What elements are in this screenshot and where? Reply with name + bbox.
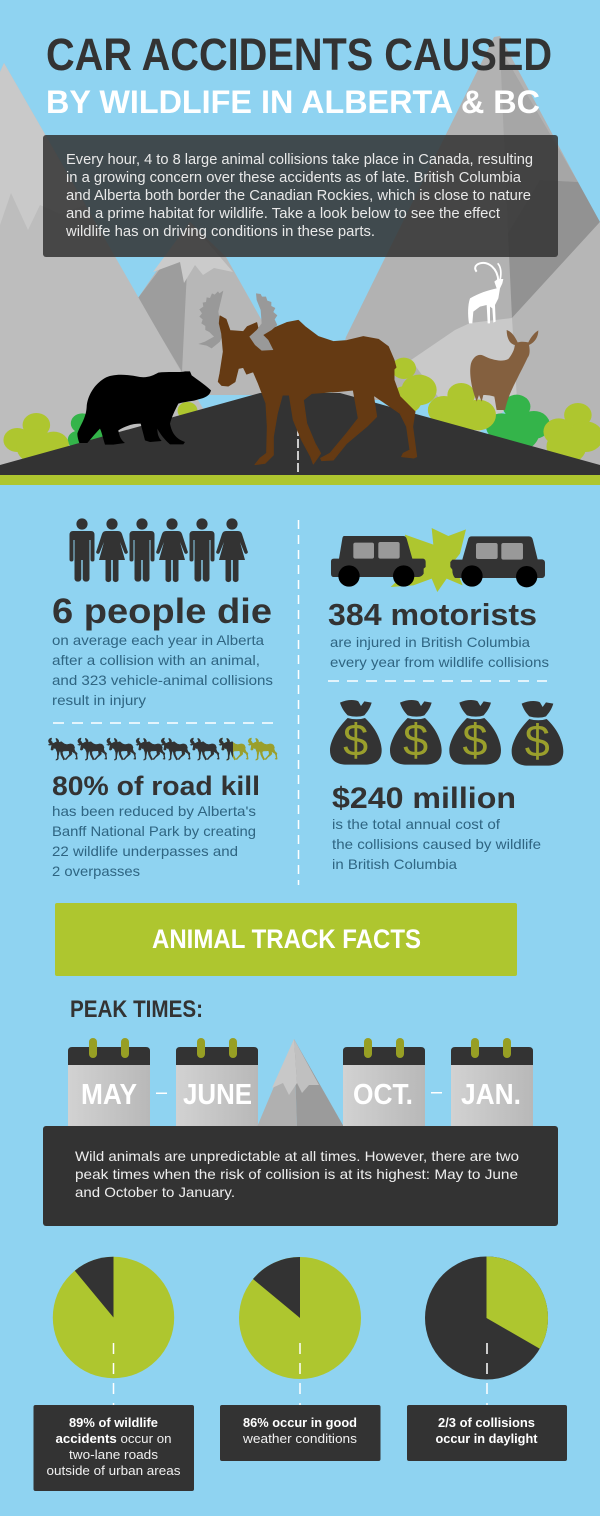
right mountain xyxy=(330,36,600,470)
heading: 80% of road kill xyxy=(52,771,260,801)
pie chart: 2/3 in daylight xyxy=(425,1256,548,1405)
icon: money bags: $ xyxy=(403,714,428,765)
callout: 86% xyxy=(220,1405,380,1461)
description: are injured in British Columbia xyxy=(330,634,530,650)
calendar: June xyxy=(176,1038,258,1127)
heading: 384 motorists xyxy=(328,597,537,632)
dash between May and June xyxy=(156,1092,167,1094)
description: and 323 vehicle-animal collisions xyxy=(52,672,273,688)
description: every year from wildlife collisions xyxy=(330,654,549,670)
icon: deer xyxy=(470,330,538,410)
description xyxy=(332,816,541,872)
icon: mountain goat xyxy=(468,263,503,323)
description xyxy=(330,634,549,670)
callout: 89%: outside of urban areas xyxy=(46,1463,181,1478)
panel: intro text: in a growing concern over these accidents as of late. British Columbia xyxy=(66,170,522,186)
icon: bear xyxy=(77,371,211,445)
calendar: January: JAN. xyxy=(461,1079,521,1111)
description xyxy=(52,803,256,879)
description: on average each year in Alberta xyxy=(52,632,264,648)
stat: 80% of road kill xyxy=(48,738,277,879)
description: Banff National Park by creating xyxy=(52,823,256,839)
stat: 384 motorists xyxy=(328,528,549,670)
icon: row of people xyxy=(70,518,248,582)
callout: 2/3: 2/3 of collisions xyxy=(438,1415,535,1430)
panel: peak times explanation: Wild animals are unpredictable at all times. However, there are two xyxy=(75,1148,519,1164)
pie chart: 86% good weather xyxy=(239,1257,361,1405)
icon: money bags: $ xyxy=(525,715,550,766)
description: has been reduced by Alberta's xyxy=(52,803,256,819)
callout: 89%: accidents occur on xyxy=(56,1431,172,1446)
description: in British Columbia xyxy=(332,856,457,872)
calendar: May xyxy=(68,1038,150,1127)
description: result in injury xyxy=(52,692,146,708)
callout: 86%: 86% occur in good xyxy=(243,1415,357,1430)
hero scene: mountains, road and animals xyxy=(0,36,600,485)
callout: 89%: 89% of wildlife xyxy=(69,1415,158,1430)
panel: peak times explanation xyxy=(43,1126,558,1226)
panel: peak times explanation: and October to January. xyxy=(75,1184,235,1200)
middle mountain xyxy=(138,222,300,395)
panel: intro text: Every hour, 4 to 8 large animal collisions take place in Canada, resulting xyxy=(66,152,533,168)
icon: money bags: $ xyxy=(343,714,368,765)
title line 2: BY WILDLIFE IN ALBERTA & BC xyxy=(46,84,540,120)
heading: $240 million xyxy=(332,782,516,815)
title xyxy=(46,29,552,120)
panel: intro text: and Alberta both border the Canadian Rockies, which is close to nature xyxy=(66,188,531,204)
road xyxy=(0,393,600,475)
icon: mountain xyxy=(257,1039,344,1127)
callout: 2/3 xyxy=(407,1405,567,1461)
icon: row of moose, 80% dark xyxy=(48,738,277,760)
banner: animal track facts xyxy=(55,903,517,976)
description: 22 wildlife underpasses and xyxy=(52,843,238,859)
bushes xyxy=(3,358,600,464)
panel: intro text: wildlife has on driving conditions in these parts. xyxy=(65,224,375,240)
left mountain xyxy=(0,63,240,470)
icon: money bags: $ xyxy=(462,714,488,765)
heading: 6 people die xyxy=(52,592,272,631)
callout: 89% xyxy=(34,1405,194,1491)
panel: intro text xyxy=(43,135,558,257)
stat: $240 million xyxy=(330,700,563,872)
heading: peak times: PEAK TIMES: xyxy=(70,996,203,1023)
calendar: May: MAY xyxy=(81,1079,137,1111)
panel: peak times explanation: peak times when the risk of collision is at its highest: May to June xyxy=(75,1166,518,1182)
callout: 2/3: occur in daylight xyxy=(436,1431,538,1446)
description: is the total annual cost of xyxy=(332,816,500,832)
callout: 89%: two-lane roads xyxy=(69,1447,159,1462)
icon: moose xyxy=(198,291,417,465)
callout: 86%: weather conditions xyxy=(242,1431,358,1446)
panel: intro text: and a prime habitat for wildlife. Take a look below to see the effect xyxy=(66,206,500,222)
banner: animal track facts: ANIMAL TRACK FACTS xyxy=(152,924,421,954)
description: 2 overpasses xyxy=(52,863,140,879)
calendar: June: JUNE xyxy=(183,1079,252,1111)
icon: money bags xyxy=(330,700,563,766)
description: after a collision with an animal, xyxy=(52,652,260,668)
description xyxy=(52,632,273,708)
calendar: October: OCT. xyxy=(353,1079,413,1111)
description: the collisions caused by wildlife xyxy=(332,836,541,852)
pie chart: 89% two-lane roads xyxy=(53,1257,174,1405)
icon: two cars colliding xyxy=(331,528,545,592)
calendar: October xyxy=(343,1038,425,1127)
stat: 6 people die xyxy=(52,518,273,708)
dash between October and January xyxy=(431,1092,442,1094)
green road edge strip xyxy=(0,475,600,485)
calendar: January xyxy=(451,1038,533,1127)
